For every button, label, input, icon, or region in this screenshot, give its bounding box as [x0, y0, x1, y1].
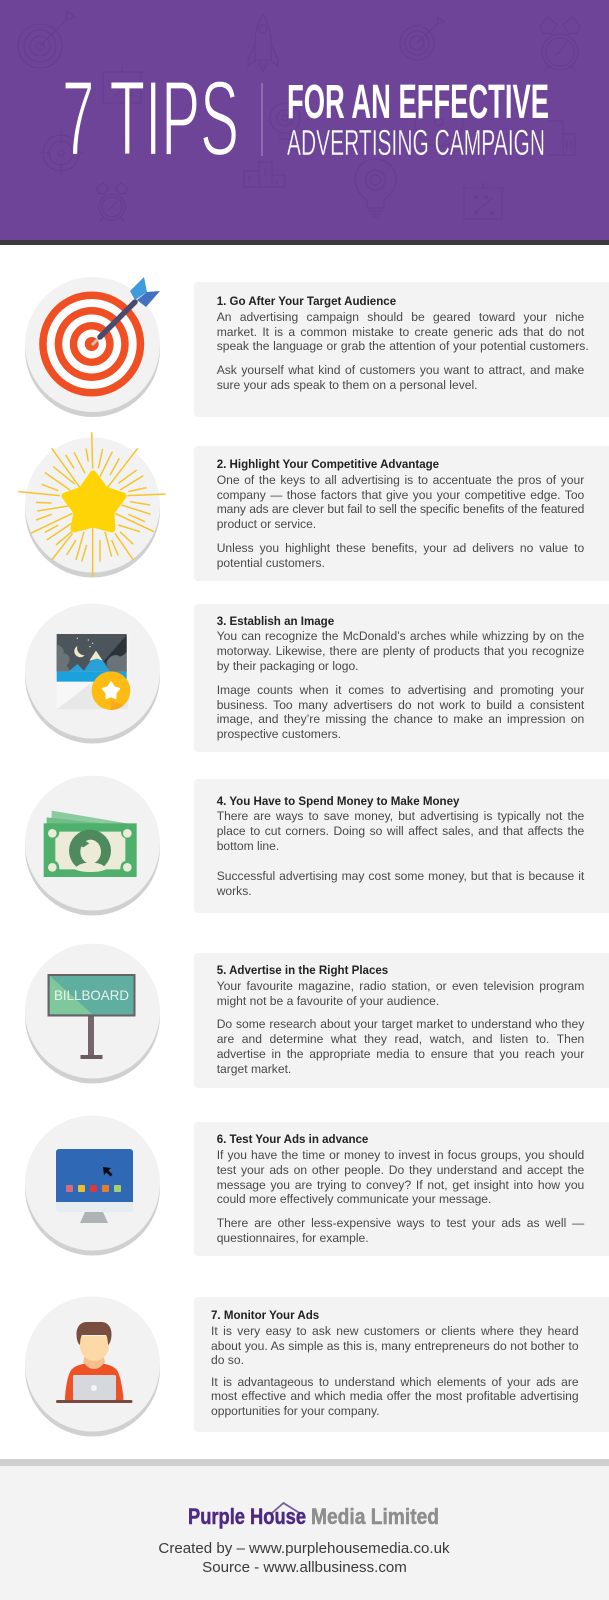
text: tip 7: 7. Monitor Your Ads: [211, 1310, 319, 1322]
header banner: [0, 0, 609, 245]
icons column: [18, 277, 166, 1436]
panel: tip 5: [194, 953, 609, 1088]
icon: desktop monitor: [25, 1116, 160, 1256]
text: tip 7: most effective and which media offer the most profitable advertising: [211, 1389, 579, 1403]
logo: Purple House Media Limited: Purple House: [188, 1504, 306, 1529]
text: tip 7: [211, 1310, 579, 1418]
text: tip 5: 5. Advertise in the Right Places: [217, 965, 388, 977]
icon: strategy board right: [462, 182, 504, 219]
text: tip 1: An advertising campaign should be geared toward your niche: [217, 310, 584, 324]
icon: rocket: [248, 15, 278, 72]
text: tip 2: potential customers.: [217, 556, 325, 570]
text: tip 3: 3. Establish an Image: [217, 616, 334, 628]
icon: billboard: [25, 944, 160, 1084]
text: tip 2: 2. Highlight Your Competitive Advantage: [217, 459, 439, 471]
text: tip 1: speak the language or grab the attention of your potential customers.: [217, 339, 589, 353]
text: tip 5: might not be a favourite of your audience.: [217, 994, 439, 1008]
text: tip 1: Ask yourself what kind of customers you want to attract, and make: [217, 363, 584, 377]
icon: crosshair: [39, 131, 83, 175]
text: tip 2: company — those factors that give you your competitive edge. Too: [217, 488, 584, 502]
text: tip 7: do so.: [211, 1353, 244, 1367]
credits text: [158, 1540, 450, 1576]
text: tip 3: You can recognize the McDonald’s arches while whizzing by on the: [217, 629, 584, 643]
text: tip 4: bottom line.: [217, 839, 279, 853]
text: tip 3: prospective customers.: [217, 727, 341, 741]
panel: tip 4: [194, 779, 609, 913]
text: tip 5: Do some research about your target market to understand who they: [217, 1017, 584, 1031]
text: tip 6: There are other less-expensive ways to test your ads as well —: [217, 1216, 584, 1230]
text: tip 2: One of the keys to all advertising is to accentuate the pros of your: [217, 473, 584, 487]
text: tip 2: [217, 459, 584, 570]
text: tip 2: many ads are clever but fail to sell the specific benefits of the featured: [217, 502, 584, 516]
text: tip 6: If you have the time or money to invest in focus groups, you should: [217, 1148, 584, 1162]
text: tip 6: 6. Test Your Ads in advance: [217, 1134, 368, 1146]
title divider: [261, 83, 263, 156]
background line icons: [18, 11, 580, 222]
icon: alarm clock right: [540, 17, 580, 72]
text: tip 3: [217, 616, 584, 741]
text: tip 5: [216, 965, 584, 1076]
panel: tip 1: [194, 282, 609, 417]
icon: star with rays: [18, 432, 166, 578]
icon: strategy board left: [101, 67, 144, 103]
icon: podium: [244, 162, 285, 187]
text: tip 5: are and determine what they read, watch, and listen to. Then: [217, 1032, 584, 1046]
icon: target outline left: [18, 11, 75, 68]
icon: target with dart: [25, 277, 160, 417]
text: tip 6: [216, 1134, 584, 1245]
text: tip 1: market. It is a common mistake to create generic ads that do not: [217, 325, 584, 339]
text: tip 6: could more effectively communicate your message.: [217, 1192, 491, 1206]
panel: tip 3: [194, 604, 609, 752]
credits text: Created by – www.purplehousemedia.co.uk: [158, 1540, 450, 1557]
text: tip 5: Your favourite magazine, radio station, or even television program: [217, 979, 584, 993]
text: tip 6: test your ads on other people. Do they understand and accept the: [217, 1163, 584, 1177]
text: tip 3: motorway. Likewise, there are plenty of products that you recognize: [217, 644, 584, 658]
panel: tip 2: [194, 446, 609, 581]
icon: gear bulb: [355, 159, 396, 217]
text: tip 2: Unless you highlight these benefits, your ad delivers no value to: [217, 541, 584, 555]
text: tip 5: advertise in the appropriate media to ensure that you reach your: [217, 1047, 584, 1061]
credits text: Source - www.allbusiness.com: [202, 1559, 407, 1576]
icon: picture with star badge: [25, 604, 160, 744]
text: tip 6: message you are trying to convey? If not, get insight into how you: [217, 1178, 584, 1192]
text: tip 4: Successful advertising may cost some money, but that is because it: [217, 869, 584, 883]
icon: gear bulb behind heading: [270, 103, 300, 139]
text: tip 4: 4. You Have to Spend Money to Make Money: [217, 796, 459, 808]
title: 7 tips: 7 TIPS: [62, 58, 239, 178]
text: tip 4: There are ways to save money, but advertising is typically not the: [217, 809, 584, 823]
icon: alarm clock left: [97, 183, 127, 222]
panel: tip 7: [194, 1297, 609, 1432]
icon: target outline right: [400, 17, 444, 60]
text: tip 2: product or service.: [217, 517, 316, 531]
text: tip 7: It is very easy to ask new customers or clients where they heard: [211, 1324, 579, 1338]
text: tip 7: about you. As simple as this is, many entrepreneurs do not bother to: [211, 1339, 579, 1353]
footer: [0, 1459, 609, 1600]
text: tip 4: [216, 796, 584, 898]
text: tip 3: by their packaging or logo.: [217, 659, 359, 673]
text: tip 1: 1. Go After Your Target Audience: [217, 296, 396, 308]
icon: gauge behind heading: [415, 98, 463, 146]
text: tip 1: [216, 296, 589, 392]
icon: person with laptop: [25, 1296, 160, 1436]
icon: bar chart behind heading: [548, 121, 575, 155]
text: tip 4: place to cut corners. Doing so will affect sales, and that affects the: [217, 824, 584, 838]
logo: Purple House Media Limited: [188, 1502, 439, 1529]
text: tip 7: opportunities for your company.: [211, 1404, 380, 1418]
text: tip 5: target market.: [217, 1062, 291, 1076]
text: tip 1: sure your ads speak to them on a personal level.: [217, 378, 478, 392]
text: tip 3: image, and they’re missing the chance to make an impression on: [217, 712, 584, 726]
icon: billboard: BILLBOARD: [54, 988, 129, 1003]
icon: banknotes: [25, 776, 160, 916]
text: tip 7: It is advantageous to understand which elements of your ads are: [211, 1375, 579, 1389]
text: tip 4: works.: [217, 884, 252, 898]
panel: tip 6: [194, 1122, 609, 1256]
text: tip 3: Image counts when it comes to advertising and promoting your: [217, 683, 584, 697]
text: tip 3: business. Too many advertisers do not work to build a consistent: [217, 698, 584, 712]
text: tip 6: questionnaires, for example.: [217, 1231, 369, 1245]
